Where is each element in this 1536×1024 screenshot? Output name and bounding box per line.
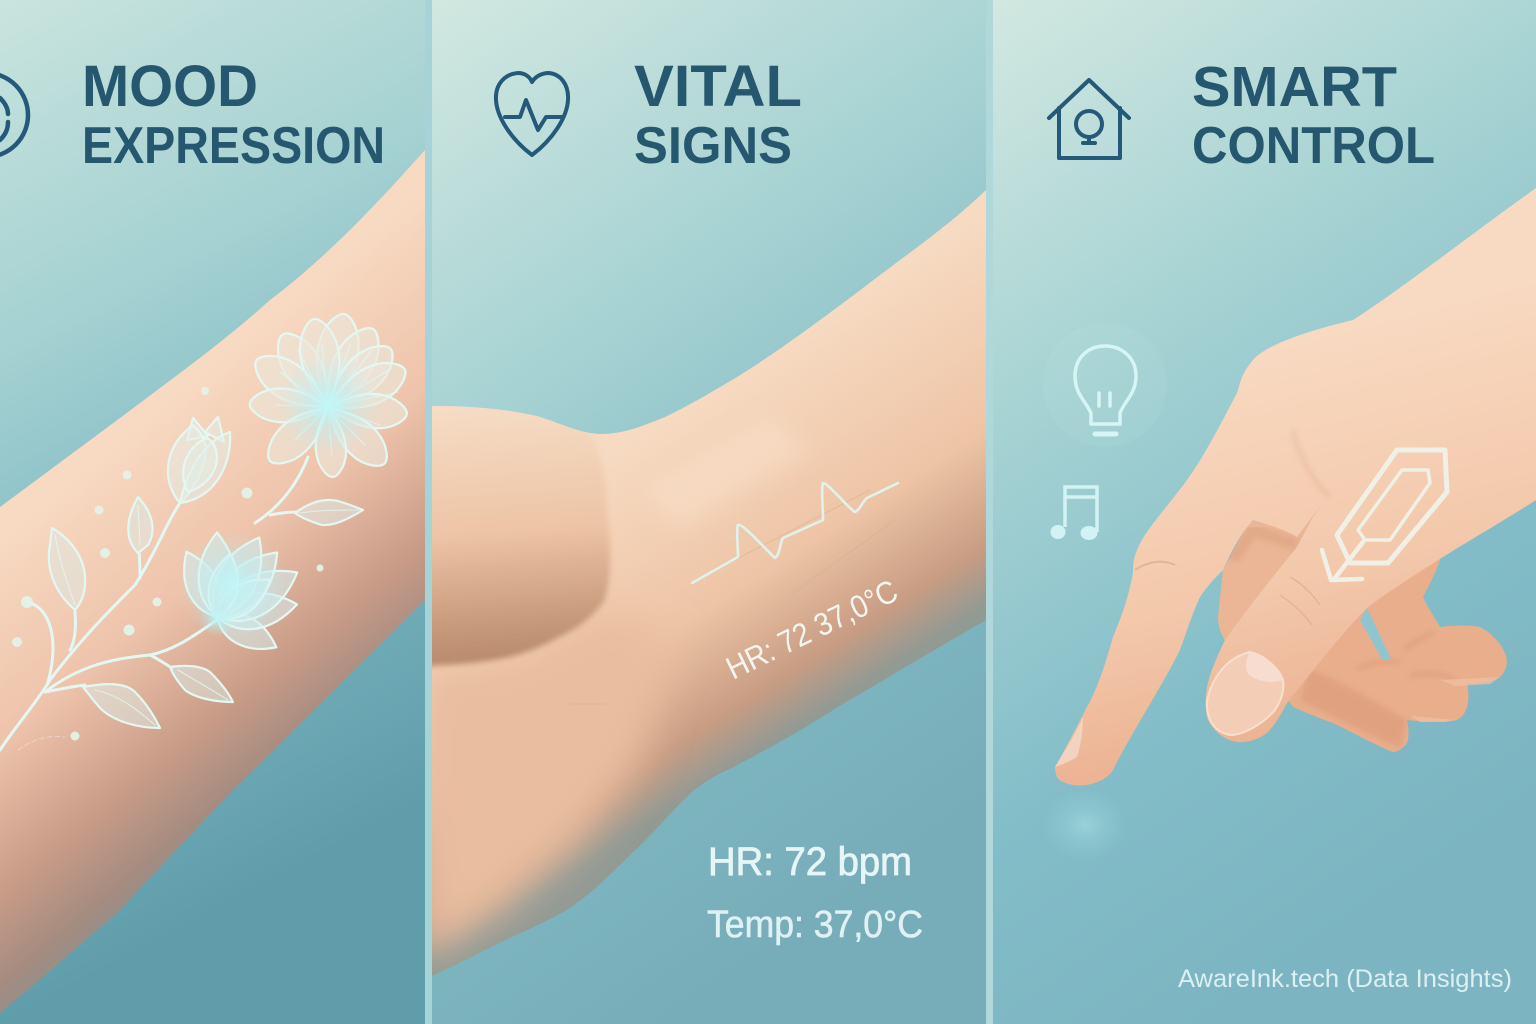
forearm with skin shading	[0, 150, 425, 1013]
thumb mound	[425, 400, 610, 666]
faint dashed arc	[18, 736, 65, 750]
icon: music note	[1050, 487, 1098, 540]
skin lines	[569, 490, 895, 704]
icon glow ring	[1043, 323, 1167, 447]
readout: heart rate: HR: 72 bpm	[708, 840, 912, 884]
glowing dots	[12, 387, 324, 740]
panel: smart control	[993, 0, 1536, 1024]
heading: mood expression: MOOD	[82, 54, 258, 119]
wrist highlight	[661, 430, 794, 519]
panel divider left	[425, 0, 432, 1024]
hand: wrist and index finger	[1055, 188, 1536, 786]
skin art: ECG waveform	[692, 483, 898, 583]
heading: smart control	[1194, 66, 1434, 164]
daisy flower	[246, 310, 413, 478]
readout: temperature: Temp: 37,0°C	[707, 904, 923, 946]
panel: vital signs	[420, 0, 986, 1024]
hand: middle finger behind thumb	[1218, 513, 1316, 640]
icon: light bulb	[1075, 346, 1136, 434]
panel divider right	[986, 0, 993, 1024]
heading: vital signs: VITAL	[634, 54, 802, 119]
icon: smart home	[1049, 80, 1129, 158]
heading: vital signs: SIGNS	[634, 117, 792, 175]
icon: heart with pulse	[496, 73, 568, 155]
panel: mood expression	[0, 0, 425, 1024]
glowing floral skin art	[0, 310, 413, 750]
icon: mood smiley	[0, 73, 28, 157]
daisy veins	[275, 345, 398, 455]
leaves	[49, 497, 363, 728]
heading: smart control: SMART	[1192, 55, 1397, 119]
hand: back fingers	[1288, 546, 1507, 752]
palm light area	[432, 622, 656, 970]
heading: mood expression	[85, 65, 382, 164]
source credit: AwareInk.tech (Data Insights)	[1178, 965, 1512, 993]
lotus flower	[183, 531, 298, 650]
glow: touch point	[1064, 807, 1107, 844]
leaf veins	[55, 505, 358, 725]
stems	[0, 457, 308, 750]
hand: thumb	[1206, 400, 1536, 742]
skin art: rotated readout: HR: 72 37,0°C	[720, 572, 903, 686]
heading: vital signs	[634, 66, 800, 164]
bud flower	[168, 417, 230, 503]
heading: mood expression: EXPRESSION	[82, 117, 385, 175]
glow: flower centres	[186, 364, 368, 635]
heading: smart control: CONTROL	[1192, 117, 1435, 175]
forearm and palm	[420, 190, 986, 976]
skin art: geometric feather	[1322, 450, 1447, 580]
